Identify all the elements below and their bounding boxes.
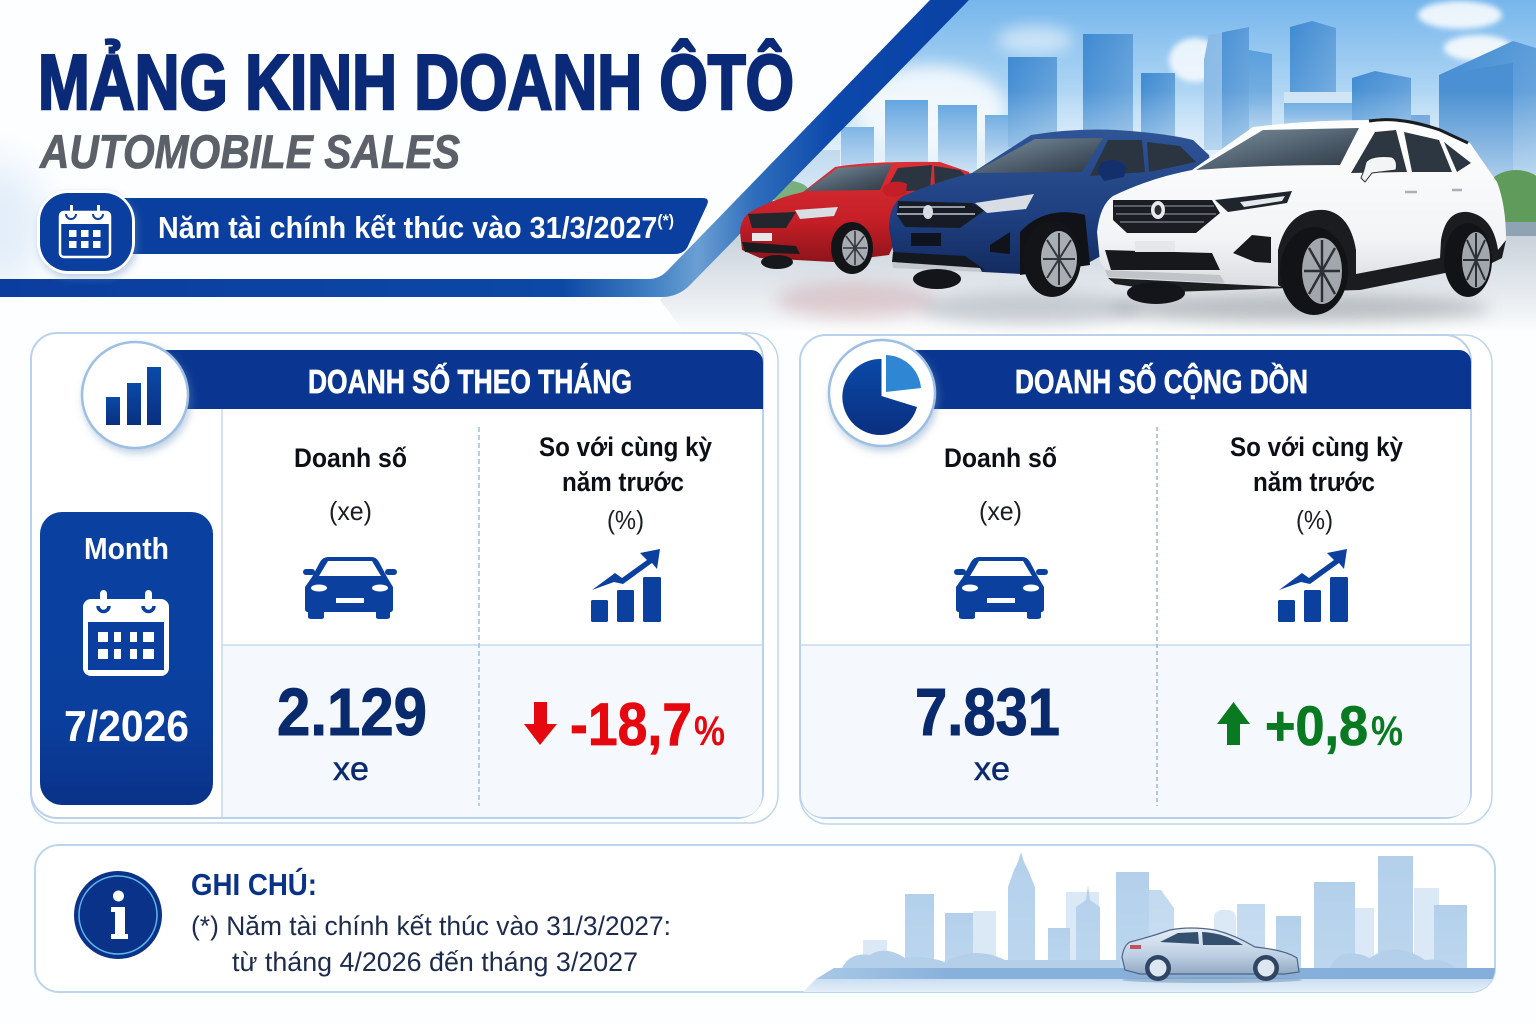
header floor with reflections (660, 222, 1536, 335)
column header: monthly change: năm trước (562, 467, 684, 497)
icon: pie chart circle (829, 340, 935, 446)
fiscal year banner (110, 198, 708, 254)
title: MẢNG KINH DOANH ÔTÔ (38, 38, 794, 126)
column header: cumulative change (1230, 432, 1403, 535)
value: cumulative sales: 7.831 (915, 675, 1060, 750)
column header: monthly change: So với cùng kỳ (539, 432, 712, 462)
note text: (*) Năm tài chính kết thúc vào 31/3/2027: (191, 911, 671, 941)
column header: monthly change: (%) (607, 505, 644, 535)
car: blue SUV (889, 130, 1215, 297)
note text: từ tháng 4/2026 đến tháng 3/2027 (232, 947, 638, 977)
lower cells: monthly (222, 645, 762, 817)
column header: cumulative sales: Doanh số (944, 443, 1057, 473)
panel: cumulative sales outer (800, 335, 1492, 824)
header band: stripe with diagonal (0, 0, 969, 297)
month card (40, 512, 213, 805)
icon: info (74, 871, 162, 959)
note text (191, 911, 671, 977)
panel: monthly sales outer (31, 333, 778, 823)
value: cumulative change with up arrow: +0,8 (1265, 694, 1368, 757)
value: cumulative sales: xe (974, 750, 1010, 787)
icon: growth chart (591, 549, 661, 622)
car: white SUV (1097, 118, 1506, 315)
header pale backdrop (0, 160, 45, 290)
value: monthly change with down arrow: -18,7 (570, 691, 692, 758)
icon: calendar (83, 590, 169, 676)
column header: monthly sales (294, 443, 407, 526)
month value: 7/2026 (64, 702, 189, 751)
icon: calendar badge (37, 190, 135, 274)
column header: monthly change (539, 432, 712, 535)
lower cells: cumulative (801, 645, 1470, 817)
heading text: DOANH SỐ THEO THÁNG (308, 362, 632, 400)
value: monthly sales (277, 675, 427, 787)
column header: monthly sales: (xe) (329, 496, 372, 526)
column header: monthly sales: Doanh số (294, 443, 407, 473)
icon: sedan illustration (1122, 928, 1302, 983)
note skyline illustration (803, 852, 1495, 992)
banner text: Năm tài chính kết thúc vào 31/3/2027 (158, 210, 697, 245)
value: cumulative change with up arrow: % (1371, 707, 1403, 754)
car: red hatchback (740, 162, 975, 274)
heading bar: monthly (165, 350, 763, 409)
note heading: GHI CHÚ: (191, 866, 317, 902)
icon: car (303, 557, 397, 619)
month label: Month (84, 531, 169, 566)
column header: cumulative change: năm trước (1253, 467, 1375, 497)
value: cumulative change with up arrow (1217, 694, 1403, 757)
value: monthly sales: xe (333, 750, 369, 787)
panel: note (35, 845, 1495, 992)
banner text: (*) (657, 211, 674, 230)
header photo: city skyline and sky (739, 0, 1536, 235)
value: monthly change with down arrow (524, 691, 725, 758)
subtitle: AUTOMOBILE SALES (39, 125, 460, 178)
icon: bar chart circle (82, 342, 188, 448)
heading bar: cumulative (900, 350, 1471, 409)
panel inner card (800, 335, 1471, 818)
value: monthly change with down arrow: % (694, 707, 725, 754)
value: monthly sales: 2.129 (277, 675, 427, 750)
value: cumulative sales (915, 675, 1060, 787)
icon: growth chart (1278, 549, 1348, 622)
column header: cumulative change: So với cùng kỳ (1230, 432, 1403, 462)
column header: cumulative sales (944, 443, 1057, 526)
panel inner card (31, 333, 763, 818)
table lines: cumulative (801, 644, 1471, 646)
column header: cumulative change: (%) (1296, 505, 1333, 535)
heading text: DOANH SỐ CỘNG DỒN (1015, 362, 1308, 400)
table lines: monthly (222, 409, 763, 818)
icon: car (954, 557, 1048, 619)
column header: cumulative sales: (xe) (979, 496, 1022, 526)
